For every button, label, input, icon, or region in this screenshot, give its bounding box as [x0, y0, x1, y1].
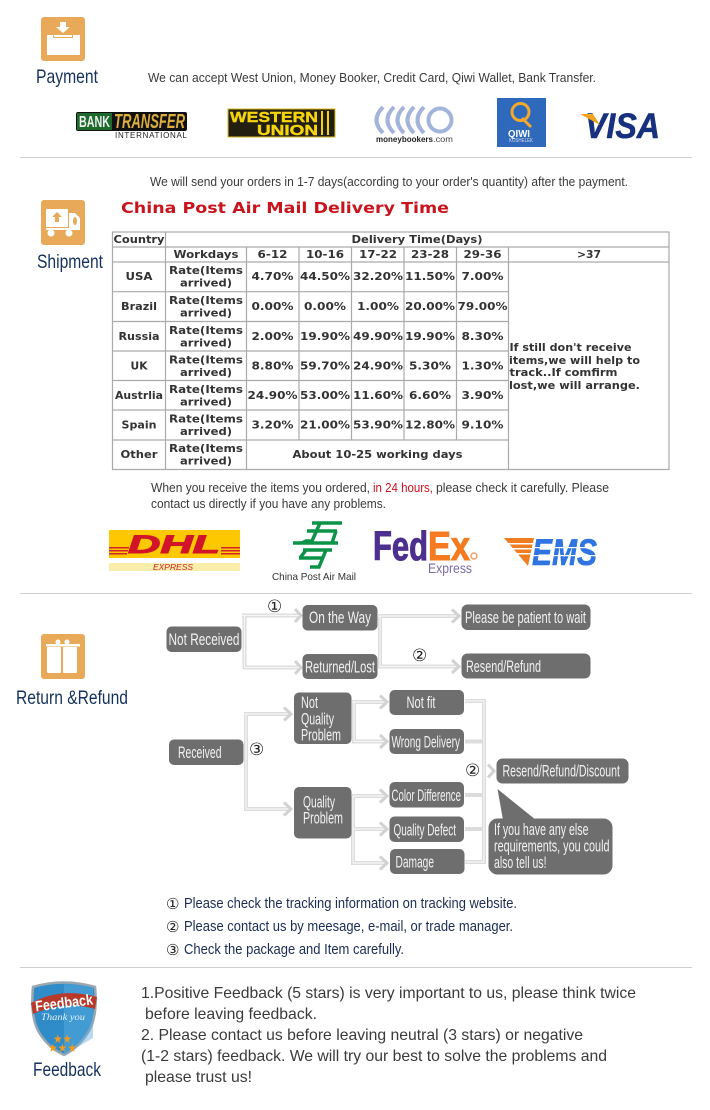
icon: feedback shield: ★★	[53, 1032, 72, 1046]
node: Wrong Delivery	[390, 729, 464, 754]
row: USA: 32.20%	[353, 271, 404, 283]
row: UK: 8.80%	[252, 360, 294, 372]
row: Other: Other	[120, 449, 158, 461]
node: Not Received	[166, 626, 242, 652]
node: On the Way: On the Way	[309, 609, 372, 627]
row: Austrlia: 6.60%	[409, 390, 452, 402]
row: Austrlia: arrived)	[180, 396, 232, 408]
flowchart connectors	[242, 609, 494, 870]
legend: step notes: Please check the tracking information on tracking website.	[184, 896, 517, 912]
table: delivery time: 10-16	[306, 249, 344, 261]
row: Russia: 8.30%	[462, 331, 504, 343]
logo: moneybookers: .com	[433, 134, 453, 144]
table: delivery time: 17-22	[359, 249, 397, 261]
row: UK	[130, 354, 504, 379]
node: Received	[169, 740, 244, 765]
table: delivery time: Country	[114, 234, 165, 246]
row: Spain: 3.20%	[252, 420, 294, 432]
row: Spain: 9.10%	[462, 420, 504, 432]
panel: return and refund	[16, 597, 628, 959]
row: Austrlia: Rate(Items	[169, 384, 243, 396]
node: Resend/Refund: Resend/Refund	[466, 658, 541, 676]
table: delivery time	[112, 232, 669, 470]
row: Spain: 53.90%	[353, 420, 404, 432]
heading: shipment: Shipment	[37, 251, 103, 273]
logo: qiwi: QIWI	[508, 128, 530, 140]
row: USA	[126, 265, 504, 290]
node: Damage	[390, 849, 464, 874]
callout: other requirements	[488, 789, 612, 874]
flowchart nodes: received branch	[169, 690, 628, 874]
logo: bank transfer	[76, 111, 188, 140]
row: UK: 24.90%	[353, 360, 404, 372]
callout: other requirements: If you have any else	[494, 821, 588, 839]
text: feedback request: 1.Positive Feedback (5 stars) is very important to us, please think twice	[141, 985, 636, 1002]
node: Not fit	[390, 690, 464, 715]
panel: feedback	[31, 982, 636, 1086]
row: Russia: arrived)	[180, 338, 232, 350]
node: Returned/Lost: Returned/Lost	[305, 658, 375, 676]
row: Austrlia: Austrlia	[115, 390, 163, 402]
logo: FedEx: Express	[428, 560, 472, 576]
row: Brazil: 20.00%	[405, 301, 456, 313]
node: Not Quality Problem: Not	[301, 694, 318, 712]
table: delivery time: >37	[577, 249, 601, 261]
row: USA: 44.50%	[300, 271, 351, 283]
legend: step notes: Please contact us by meesage, e-mail, or trade manager.	[184, 919, 513, 935]
row: Russia: Rate(Items	[169, 325, 243, 337]
logo: qiwi	[497, 98, 546, 147]
note: more than 37 days	[509, 342, 640, 392]
row: UK: 5.30%	[409, 360, 452, 372]
logo: China Post Air Mail	[272, 523, 356, 583]
row: UK: Rate(Items	[169, 354, 243, 366]
logo: China Post Air Mail: China Post Air Mail	[272, 571, 356, 583]
node: Not Quality Problem	[294, 692, 352, 744]
chart title: China Post Air Mail Delivery Time	[121, 199, 449, 217]
logo: visa: VISA	[585, 107, 660, 146]
row: Russia: 49.90%	[353, 331, 404, 343]
heading: feedback: Feedback	[33, 1059, 101, 1081]
node: Not Quality Problem: Quality	[301, 710, 334, 728]
node: Color Difference: Color Difference	[392, 787, 461, 805]
legend: step notes	[166, 895, 517, 959]
legend: step notes: ②	[166, 918, 179, 936]
row: USA: 11.50%	[405, 271, 456, 283]
row: USA: Rate(Items	[169, 265, 243, 277]
note: more than 37 days: lost,we will arrange.	[509, 380, 640, 392]
row: USA: arrived)	[180, 278, 232, 290]
row: Spain: 12.80%	[405, 420, 456, 432]
row: UK: arrived)	[180, 367, 232, 379]
text: feedback request: please trust us!	[145, 1069, 252, 1086]
row: Russia: 2.00%	[252, 331, 294, 343]
icon: feedback shield	[31, 982, 97, 1055]
node: Please be patient to wait	[462, 604, 590, 630]
table: delivery time: 6-12	[258, 249, 288, 261]
text: inspection notice	[151, 481, 609, 511]
node: Quality Problem: Quality	[303, 794, 335, 812]
row: Brazil: 0.00%	[252, 301, 294, 313]
legend: step notes: ①	[166, 895, 179, 913]
node: Quality Defect: Quality Defect	[394, 822, 456, 840]
row: Brazil: 79.00%	[458, 301, 508, 313]
row: Spain: arrived)	[180, 426, 232, 438]
row: Brazil: 1.00%	[357, 301, 400, 313]
logo: qiwi: KOSHELEK	[509, 138, 534, 144]
logo: FedEx: Ex	[428, 523, 470, 569]
logo: FedEx	[373, 523, 477, 576]
text: feedback request: 2. Please contact us before leaving neutral (3 stars) or negative	[141, 1027, 583, 1044]
node: Returned/Lost	[302, 654, 378, 679]
flowchart nodes: not received branch	[166, 604, 590, 679]
row: USA: 7.00%	[462, 271, 504, 283]
node: On the Way	[302, 605, 378, 630]
text: inspection notice: contact us directly if you have any problems.	[151, 497, 386, 511]
logo: DHL	[109, 530, 240, 572]
row: Other: Rate(Items	[169, 443, 243, 455]
node: Received: Received	[178, 744, 222, 762]
row: Spain: Rate(Items	[169, 414, 243, 426]
logo: EMS: EMS	[532, 532, 597, 573]
logo: DHL: DHL	[128, 531, 220, 559]
note: more than 37 days: track..If comfirm	[510, 367, 618, 379]
row: Spain	[122, 414, 504, 438]
logo: western union: UNION	[257, 122, 318, 139]
step marker 2: ②	[465, 761, 480, 781]
icon: feedback shield: Thank you	[41, 1012, 86, 1022]
row: Spain: Spain	[122, 420, 156, 432]
step marker 1: ①	[267, 597, 282, 617]
icon: payment tray	[41, 17, 85, 61]
table: delivery time: 29-36	[464, 249, 502, 261]
node: Color Difference	[390, 782, 464, 808]
row: USA: USA	[126, 271, 153, 283]
row: Other: arrived)	[180, 456, 232, 468]
row: UK: 59.70%	[300, 360, 351, 372]
text: feedback request	[141, 985, 636, 1086]
table: delivery time: 23-28	[411, 249, 449, 261]
row: Brazil: arrived)	[180, 308, 232, 320]
text: inspection notice: please check it carefully. Please	[436, 481, 609, 495]
node: Wrong Delivery: Wrong Delivery	[392, 734, 460, 752]
node: Damage: Damage	[396, 854, 434, 872]
text: accepted payment methods: We can accept West Union, Money Booker, Credit Card, Qiwi Wallet, Bank Transfer.	[148, 71, 596, 85]
row: Spain: 21.00%	[300, 420, 351, 432]
row: Russia: Russia	[118, 331, 160, 343]
row: Brazil: Rate(Items	[169, 295, 243, 307]
text: inspection notice: in 24 hours,	[373, 481, 433, 495]
row: Austrlia	[115, 384, 504, 408]
note: more than 37 days: items,we will help to	[509, 355, 640, 367]
heading: return and refund: Return &Refund	[16, 687, 128, 709]
logo: DHL: EXPRESS	[153, 563, 194, 572]
row: Other: About 10-25 working days	[292, 449, 462, 461]
node: Quality Defect	[390, 816, 464, 842]
step marker 2: ②	[412, 646, 427, 666]
logo: western union	[228, 109, 335, 139]
text: shipping time: We will send your orders in 1-7 days(according to your order's quantity) after the payment.	[150, 175, 628, 189]
row: Russia: 19.90%	[300, 331, 351, 343]
node: Not Received: Not Received	[168, 631, 240, 649]
icon: delivery truck	[41, 200, 85, 245]
logo: bank transfer: BANK	[79, 114, 110, 131]
panel: shipment	[37, 175, 669, 583]
icon: feedback shield: Feedback	[34, 991, 94, 1015]
node: Not fit: Not fit	[406, 694, 436, 712]
row: Austrlia: 11.60%	[353, 390, 404, 402]
logo: western union: WESTERN	[230, 109, 318, 126]
row: Russia: 19.90%	[405, 331, 456, 343]
panel: payment	[36, 17, 660, 147]
logo: moneybookers	[376, 107, 453, 144]
row: Austrlia: 3.90%	[462, 390, 504, 402]
heading: payment: Payment	[36, 66, 98, 88]
node: Quality Problem: Problem	[303, 810, 343, 828]
legend: step notes: Check the package and Item carefully.	[184, 942, 404, 958]
note: more than 37 days: If still don't receive	[510, 342, 632, 354]
text: inspection notice: When you receive the items you ordered,	[151, 481, 370, 495]
callout: other requirements: also tell us!	[494, 854, 546, 872]
node: Resend/Refund	[462, 654, 590, 678]
logo: EMS	[504, 532, 598, 573]
row: Austrlia: 24.90%	[248, 390, 298, 402]
node: Not Quality Problem: Problem	[301, 726, 341, 744]
logo: moneybookers: moneybookers	[376, 134, 433, 144]
table: delivery time: Delivery Time(Days)	[352, 234, 482, 246]
row: Other	[120, 443, 462, 468]
row: Brazil: Brazil	[121, 301, 157, 313]
legend: step notes: ③	[166, 941, 179, 959]
node: Please be patient to wait: Please be patient to wait	[465, 609, 586, 627]
step marker 3: ③	[249, 740, 264, 760]
row: USA: 4.70%	[252, 271, 294, 283]
logo: bank transfer: INTERNATIONAL	[115, 131, 188, 140]
node: Quality Problem	[294, 787, 352, 838]
row: Brazil	[121, 295, 508, 320]
row: UK: 1.30%	[462, 360, 504, 372]
logo: FedEx: Fed	[373, 523, 428, 569]
table: delivery time: Workdays	[174, 249, 238, 261]
icon: feedback shield: ★★★	[48, 1041, 77, 1055]
text: feedback request: before leaving feedback.	[145, 1006, 317, 1023]
node: Resend/Refund/Discount: Resend/Refund/Discount	[502, 762, 620, 780]
row: Austrlia: 53.00%	[300, 390, 351, 402]
logo: bank transfer: TRANSFER	[114, 111, 185, 133]
row: UK: UK	[130, 360, 148, 372]
row: Russia	[118, 325, 504, 350]
icon: gift box	[41, 634, 85, 679]
node: Resend/Refund/Discount	[496, 758, 628, 784]
text: feedback request: (1-2 stars) feedback. We will try our best to solve the problems and	[141, 1048, 607, 1065]
callout: other requirements: requirements, you could	[494, 838, 610, 856]
row: Brazil: 0.00%	[304, 301, 347, 313]
